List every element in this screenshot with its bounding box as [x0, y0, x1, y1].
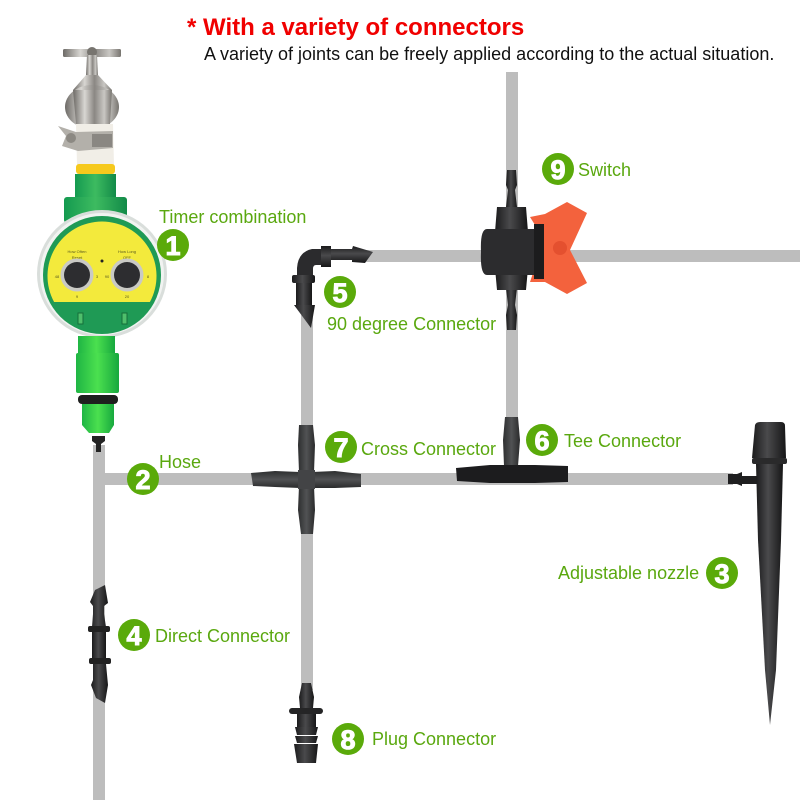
- badge 5: [324, 276, 356, 308]
- label: direct connector: Direct Connector: [155, 626, 290, 646]
- badge 1: [157, 229, 189, 261]
- badge 8: [332, 723, 364, 755]
- timer combination with tap: [37, 47, 167, 452]
- badge 7: [325, 431, 357, 463]
- badge 9: [542, 153, 574, 185]
- label: tee connector: Tee Connector: [564, 431, 681, 451]
- dial labels: 20: [125, 294, 130, 299]
- switch valve: [481, 170, 587, 330]
- dial labels: 48: [55, 274, 60, 279]
- dial labels: Reset: [72, 255, 83, 260]
- badge 9: 9: [550, 155, 566, 185]
- green nuts: [64, 174, 127, 223]
- clear housing: [37, 210, 167, 338]
- label: 90 degree connector: 90 degree Connector: [327, 314, 496, 334]
- dial labels: [55, 249, 150, 299]
- badge 2: 2: [135, 465, 151, 495]
- badge 5: 5: [332, 278, 348, 308]
- white coupling and clamp: [58, 124, 114, 165]
- subtitle: A variety of joints can be freely applied according to the actual situation.: [204, 44, 774, 64]
- title: * With a variety of connectors: [187, 14, 524, 41]
- plug connector: [289, 683, 323, 763]
- nozzle spike: [756, 464, 783, 725]
- badge 6: 6: [534, 426, 550, 456]
- dial labels: 8: [147, 274, 150, 279]
- yellow ring: [76, 164, 115, 174]
- dial labels: How Long: [118, 249, 136, 254]
- label: adjustable nozzle: Adjustable nozzle: [558, 563, 699, 583]
- 90 degree connector: [292, 246, 373, 328]
- nozzle head: [752, 422, 786, 458]
- valve handle: [530, 202, 587, 294]
- direct connector: [88, 585, 111, 703]
- dial labels: 3: [96, 274, 99, 279]
- dial face: [43, 216, 161, 334]
- left dial: [60, 258, 94, 292]
- tap handle: [63, 47, 121, 90]
- badge 3: 3: [714, 559, 730, 589]
- badge 4: 4: [126, 621, 142, 651]
- adjustable nozzle: [728, 422, 787, 725]
- nozzle inlet: [728, 472, 760, 486]
- badge 4: [118, 619, 150, 651]
- cross connector: [251, 425, 361, 534]
- badge 1: 1: [165, 231, 181, 261]
- outlet neck and nut: [76, 336, 119, 393]
- dial labels: OFF: [123, 255, 132, 260]
- outlet thread: [82, 404, 114, 433]
- label: timer combination: Timer combination: [159, 207, 306, 227]
- tee connector: [456, 417, 568, 483]
- right dial: [110, 258, 144, 292]
- tap ball: [65, 85, 119, 129]
- badge 6: [526, 424, 558, 456]
- label: cross connector: Cross Connector: [361, 439, 496, 459]
- dial labels: 90: [105, 274, 110, 279]
- badge 7: 7: [333, 433, 349, 463]
- nozzle ring: [752, 458, 787, 464]
- badge 3: [706, 557, 738, 589]
- badge 2: [127, 463, 159, 495]
- black washer: [78, 395, 118, 404]
- label: plug connector: Plug Connector: [372, 729, 496, 749]
- badge 8: 8: [340, 725, 356, 755]
- dial labels: 9: [76, 294, 79, 299]
- outlet barb: [92, 436, 105, 452]
- valve body: [481, 170, 544, 330]
- label: switch: Switch: [578, 160, 631, 180]
- dial labels: How Often: [68, 249, 86, 254]
- label: hose: Hose: [159, 452, 201, 472]
